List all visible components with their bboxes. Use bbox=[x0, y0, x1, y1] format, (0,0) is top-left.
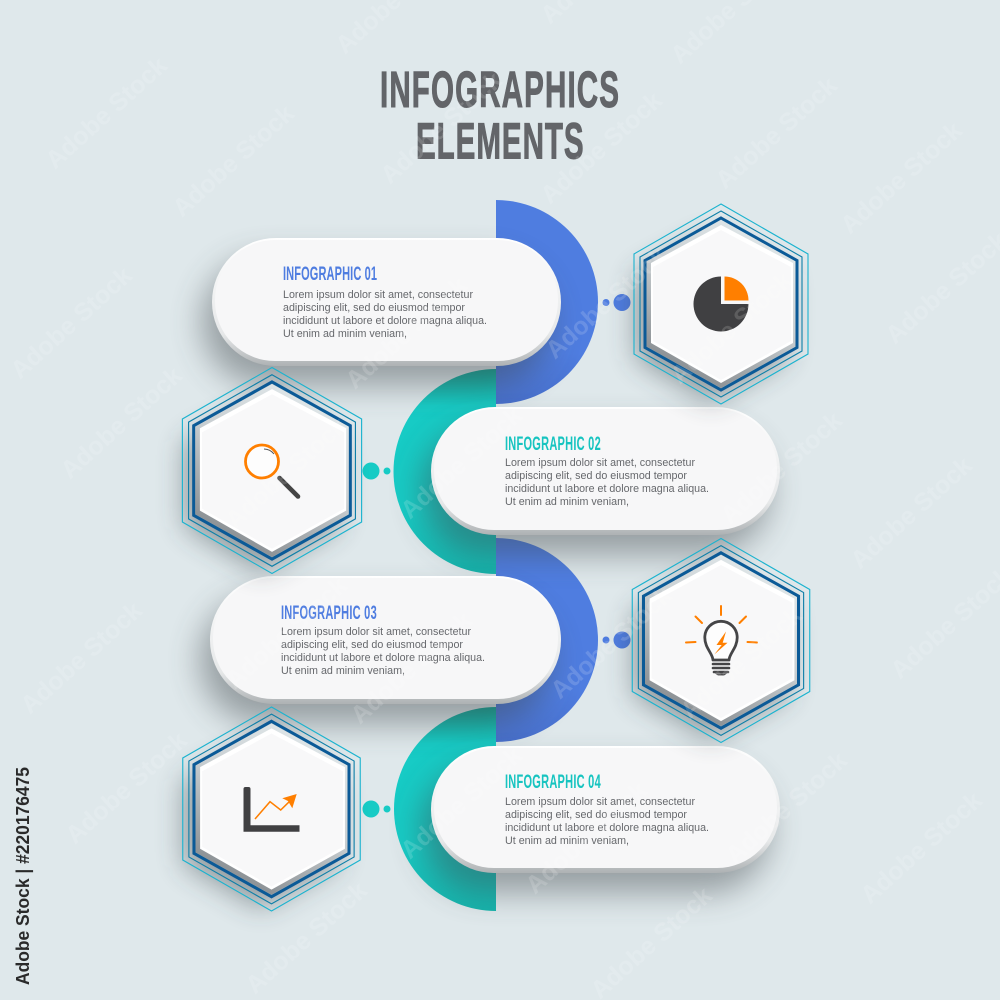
body text 03 bbox=[281, 626, 485, 677]
teal arc 4 bbox=[394, 707, 496, 911]
body text 04: Ut enim ad minim veniam, bbox=[505, 835, 629, 847]
connector dots 1 bbox=[602, 294, 630, 311]
watermark: Adobe Stock bbox=[395, 401, 528, 524]
title bbox=[380, 61, 619, 170]
title: INFOGRAPHICS bbox=[380, 61, 619, 118]
watermark: Adobe Stock bbox=[715, 406, 848, 529]
watermark: Adobe Stock bbox=[665, 266, 798, 389]
panel: infographic 02 bbox=[421, 407, 780, 555]
hexagon 2 bbox=[182, 368, 362, 574]
connector dots 2 bbox=[362, 462, 390, 480]
watermark: Adobe Stock bbox=[40, 51, 173, 174]
watermark: Adobe Stock bbox=[60, 726, 193, 849]
watermark: Adobe Stock bbox=[167, 99, 300, 222]
body text 01: incididunt ut labore et dolore magna aliqua. bbox=[283, 315, 487, 327]
watermark: Adobe Stock bbox=[520, 776, 653, 899]
watermark: Adobe Stock bbox=[535, 86, 668, 209]
watermark: Adobe Stock bbox=[540, 241, 673, 364]
panel: infographic 01 bbox=[202, 238, 561, 386]
body text 03: incididunt ut labore et dolore magna aliqua. bbox=[281, 652, 485, 664]
connector dots 4 bbox=[362, 800, 390, 818]
body text 03: adipiscing elit, sed do eiusmod tempor bbox=[281, 639, 463, 651]
watermark: Adobe Stock bbox=[55, 361, 188, 484]
watermark: Adobe Stock bbox=[345, 606, 478, 729]
body text 01: Ut enim ad minim veniam, bbox=[283, 328, 407, 340]
watermark: Adobe Stock bbox=[220, 411, 353, 534]
watermark: Adobe Stock bbox=[15, 596, 148, 719]
watermark: Adobe Stock bbox=[835, 116, 968, 239]
body text 04: adipiscing elit, sed do eiusmod tempor bbox=[505, 809, 687, 821]
panel: infographic 03 bbox=[200, 576, 561, 724]
body text 03: Lorem ipsum dolor sit amet, consectetur bbox=[281, 626, 471, 638]
body text 01: adipiscing elit, sed do eiusmod tempor bbox=[283, 302, 465, 314]
teal arc 2 bbox=[394, 369, 496, 574]
body text 02: incididunt ut labore et dolore magna aliqua. bbox=[505, 483, 709, 495]
blue arc 3 bbox=[496, 538, 598, 742]
blue arc 1 bbox=[496, 200, 598, 404]
watermark: Adobe Stock bbox=[240, 876, 373, 999]
watermark: Adobe Stock bbox=[220, 571, 353, 694]
icon: light bulb bbox=[686, 606, 757, 676]
heading 02: INFOGRAPHIC 02 bbox=[505, 434, 601, 455]
panel: infographic 04 bbox=[421, 746, 780, 893]
connector dots 3 bbox=[602, 632, 630, 648]
stock id label: Adobe Stock | #220176475 bbox=[13, 767, 33, 985]
title: ELEMENTS bbox=[416, 112, 584, 170]
body text 02: Lorem ipsum dolor sit amet, consectetur bbox=[505, 457, 695, 469]
body text 01: Lorem ipsum dolor sit amet, consectetur bbox=[283, 289, 473, 301]
watermark: Adobe Stock bbox=[720, 746, 853, 869]
watermark: Adobe Stock bbox=[845, 451, 978, 574]
icon: magnifier bbox=[246, 445, 298, 496]
body text 04: incididunt ut labore et dolore magna aliqua. bbox=[505, 822, 709, 834]
watermark: Adobe Stock bbox=[395, 741, 528, 864]
heading 03: INFOGRAPHIC 03 bbox=[281, 603, 377, 624]
watermark: Adobe Stock bbox=[375, 66, 508, 189]
heading 04: INFOGRAPHIC 04 bbox=[505, 772, 601, 793]
watermark: Adobe Stock bbox=[5, 261, 138, 384]
watermark: Adobe Stock bbox=[340, 271, 473, 394]
icon: growth chart bbox=[244, 787, 300, 832]
body text 01 bbox=[283, 289, 487, 340]
body text 03: Ut enim ad minim veniam, bbox=[281, 665, 405, 677]
body text 04: Lorem ipsum dolor sit amet, consectetur bbox=[505, 796, 695, 808]
heading 01: INFOGRAPHIC 01 bbox=[283, 264, 377, 285]
watermark: Adobe Stock bbox=[545, 581, 678, 704]
watermark: Adobe Stock bbox=[675, 601, 808, 724]
hexagon 3 bbox=[632, 538, 810, 742]
body text 04 bbox=[505, 796, 709, 847]
body text 02: Ut enim ad minim veniam, bbox=[505, 496, 629, 508]
watermark: Adobe Stock bbox=[710, 71, 843, 194]
hexagon 4 bbox=[183, 707, 360, 911]
body text 02 bbox=[505, 457, 709, 508]
body text 02: adipiscing elit, sed do eiusmod tempor bbox=[505, 470, 687, 482]
hexagon 1 bbox=[634, 204, 808, 404]
watermark: Adobe Stock bbox=[855, 786, 988, 909]
icon: pie chart bbox=[694, 276, 748, 332]
